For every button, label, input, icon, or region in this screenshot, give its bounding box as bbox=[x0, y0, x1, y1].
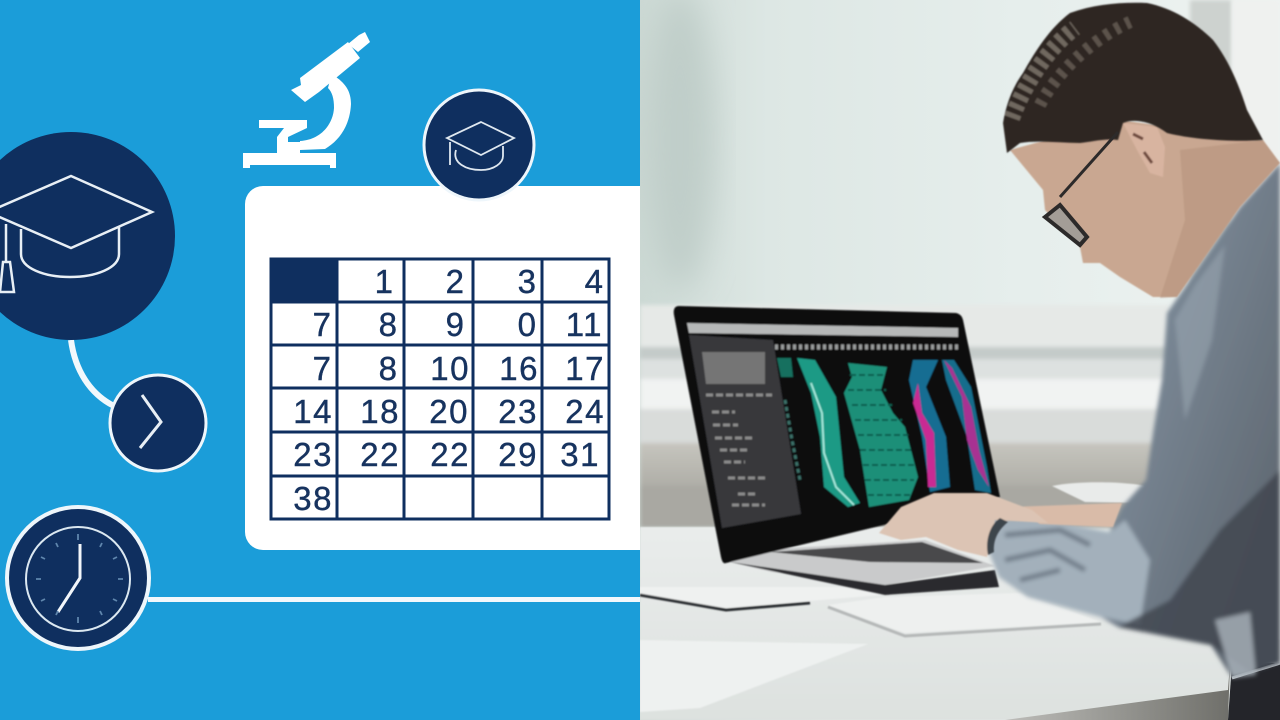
calendar numbers: 4 bbox=[585, 263, 603, 300]
photo: window background bbox=[640, 0, 1280, 720]
calendar numbers: 20 bbox=[429, 393, 469, 430]
photo: person neck and face bbox=[1010, 120, 1280, 298]
connector: line from clock bbox=[148, 597, 640, 602]
laptop title bar bbox=[687, 323, 958, 337]
calendar numbers: 16 bbox=[499, 350, 539, 387]
chart: blue and magenta bands bbox=[909, 360, 991, 493]
calendar numbers: 0 bbox=[518, 306, 536, 343]
calendar numbers: 31 bbox=[560, 436, 600, 473]
calendar numbers: 24 bbox=[565, 393, 605, 430]
photo: laptop bbox=[674, 306, 1000, 595]
calendar numbers: 1 bbox=[375, 263, 393, 300]
icon: chevron badge bbox=[110, 375, 206, 471]
icon: microscope bbox=[243, 32, 370, 168]
calendar numbers bbox=[293, 263, 605, 517]
calendar numbers: 7 bbox=[313, 306, 331, 343]
panel: blue graphics side bbox=[0, 0, 640, 720]
panel: white calendar card bbox=[245, 186, 640, 550]
photo: desk bbox=[640, 527, 1280, 720]
calendar numbers: 11 bbox=[566, 306, 603, 343]
icon: large graduation cap badge bbox=[0, 132, 175, 340]
laptop toolbar strip bbox=[775, 344, 958, 350]
photo: person glasses bbox=[1045, 132, 1118, 245]
photo: papers and notebook bbox=[640, 482, 1145, 712]
calendar numbers: 7 bbox=[313, 350, 331, 387]
calendar numbers: 22 bbox=[430, 436, 470, 473]
icon: clock bbox=[7, 507, 149, 649]
calendar numbers: 8 bbox=[379, 306, 397, 343]
calendar numbers: 23 bbox=[498, 393, 538, 430]
calendar numbers: 8 bbox=[379, 350, 397, 387]
icon: small graduation cap badge bbox=[424, 90, 534, 200]
photo: person shirt bbox=[987, 163, 1280, 678]
laptop software sidebar bbox=[689, 335, 801, 528]
calendar numbers: 10 bbox=[430, 350, 470, 387]
calendar numbers: 29 bbox=[498, 436, 538, 473]
calendar numbers: 14 bbox=[293, 393, 333, 430]
calendar numbers: 22 bbox=[360, 436, 400, 473]
calendar numbers: 9 bbox=[446, 306, 464, 343]
photo: person hair bbox=[1003, 3, 1263, 153]
calendar numbers: 18 bbox=[360, 393, 400, 430]
laptop screen bbox=[689, 335, 994, 528]
calendar numbers: 38 bbox=[293, 480, 333, 517]
calendar grid bbox=[271, 259, 609, 519]
photo: person hands and watch bbox=[879, 493, 1122, 557]
calendar numbers: 17 bbox=[565, 350, 605, 387]
connector: curve to chevron badge bbox=[71, 340, 114, 406]
calendar header filled cell bbox=[270, 258, 338, 302]
photo: window sill bbox=[640, 305, 1170, 528]
photo: chair edge bbox=[1232, 663, 1280, 678]
calendar numbers: 3 bbox=[518, 263, 536, 300]
chart: teal bands bbox=[777, 358, 918, 507]
laptop base bbox=[724, 540, 995, 585]
laptop lid bbox=[674, 306, 1000, 563]
calendar numbers: 23 bbox=[293, 436, 333, 473]
panel: photo of student at laptop bbox=[640, 0, 1280, 720]
calendar numbers: 2 bbox=[446, 263, 464, 300]
